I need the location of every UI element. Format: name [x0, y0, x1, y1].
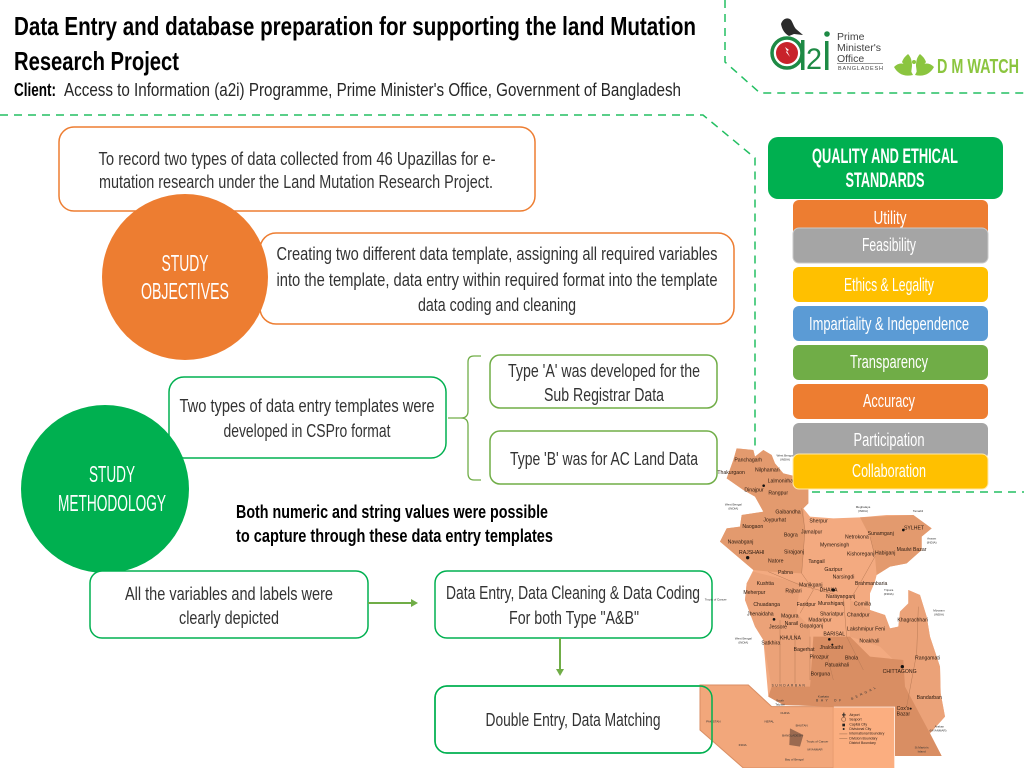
brace connector: [448, 356, 481, 480]
panel: objective statement: [59, 127, 535, 211]
map of Bangladesh: RAJSHAHI: [739, 550, 764, 556]
map of Bangladesh: Gaibandha: [775, 509, 801, 515]
map of Bangladesh: (INDIA): [738, 640, 748, 644]
title: Data Entry and database preparation for supporting the land Mutation: [14, 11, 696, 41]
map of Bangladesh: DHAKA: [820, 588, 838, 594]
map of Bangladesh: (INDIA): [927, 540, 937, 544]
map of Bangladesh: Sirajganj: [784, 550, 804, 556]
map of Bangladesh: Tamabil: [913, 509, 923, 513]
map of Bangladesh: Jessore: [769, 624, 787, 630]
map of Bangladesh: (INDIA): [858, 509, 868, 513]
map of Bangladesh: Faridpur: [797, 602, 816, 608]
map of Bangladesh: KHULNA: [780, 636, 801, 642]
map of Bangladesh: INDIA: [739, 743, 747, 747]
map of Bangladesh: Assam: [927, 536, 937, 540]
map of Bangladesh: Bhola: [845, 656, 858, 662]
standards heading: STANDARDS: [846, 169, 924, 192]
bold note: [236, 502, 553, 546]
map of Bangladesh: Noakhali: [859, 638, 879, 644]
client line: Access to Information (a2i) Programme, Prime Minister's Office, Government of Bangladesh: [64, 80, 681, 100]
standard: ethics and legality: Ethics & Legality: [844, 275, 934, 295]
map of Bangladesh: Satkhira: [761, 640, 780, 646]
panel: objective activities: Creating two different data template, assigning all required variables: [276, 244, 718, 264]
map of Bangladesh: Netrokona: [845, 534, 869, 540]
panel: type A: Type 'A' was developed for the: [508, 361, 700, 381]
map of Bangladesh: (MYANMAR): [929, 728, 947, 732]
map of Bangladesh: Jamalpur: [801, 529, 822, 535]
map of Bangladesh: (INDIA): [728, 506, 738, 510]
panel: variables and labels: clearly depicted: [179, 608, 279, 628]
map of Bangladesh: Shariatpur: [820, 611, 844, 617]
standards heading: [768, 137, 1003, 199]
map of Bangladesh: Capital City: [849, 722, 867, 726]
title: [14, 11, 696, 76]
map of Bangladesh: Habiganj: [875, 551, 895, 557]
map of Bangladesh: Tropic of Cancer: [705, 598, 727, 602]
map of Bangladesh: Jhalokathi: [820, 645, 843, 651]
panel: data entry and cleaning: Data Entry, Data Cleaning & Data Coding: [446, 583, 700, 603]
panel: double entry: [435, 686, 712, 753]
map of Bangladesh: Brahmanbaria: [855, 581, 888, 587]
map of Bangladesh: Divisional City: [849, 727, 871, 731]
standard: feasibility: Feasibility: [862, 235, 916, 255]
panel: objective activities: data coding and cleaning: [418, 295, 576, 315]
map of Bangladesh: Seaport: [849, 718, 862, 722]
map of Bangladesh: Manikganj: [799, 582, 823, 588]
map of Bangladesh: (INDIA): [780, 458, 790, 462]
map of Bangladesh: Patuakhali: [825, 663, 849, 669]
map of Bangladesh: Gopalganj: [800, 623, 823, 629]
map of Bangladesh: Madaripur: [808, 618, 832, 624]
map of Bangladesh: Joypurhat: [763, 517, 787, 523]
panel: variables and labels: All the variables and labels were: [125, 584, 333, 604]
map of Bangladesh: Panchagarh: [734, 458, 762, 464]
map of Bangladesh: Narsingdi: [833, 574, 854, 580]
map of Bangladesh: CHINA: [780, 711, 790, 715]
map of Bangladesh: Rangamati: [915, 655, 940, 661]
map of Bangladesh: Kishoreganj: [847, 552, 874, 558]
map of Bangladesh: Borguna: [811, 671, 830, 677]
map of Bangladesh: International Boundary: [849, 732, 885, 736]
map of Bangladesh: Dinajpur: [744, 488, 764, 494]
map of Bangladesh: Thakurgaon: [717, 470, 745, 476]
map of Bangladesh: Tangail: [808, 559, 825, 565]
panel: objective activities: [260, 233, 734, 324]
logo: D M Watch: [894, 54, 1019, 78]
map of Bangladesh: Division Boundary: [849, 736, 878, 740]
logo: a2i Prime Minister's Office: 2: [806, 43, 822, 76]
arrow: variables to data entry: [368, 599, 418, 607]
map of Bangladesh: Talpatti: [775, 702, 785, 706]
bold note: to capture through these data entry templates: [236, 526, 553, 546]
map of Bangladesh: CHITTAGONG: [883, 669, 917, 675]
map of Bangladesh: Tropic of Cancer: [806, 739, 828, 743]
logo: a2i Prime Minister's Office: Office: [837, 53, 864, 65]
panel: templates: [169, 377, 446, 458]
standard: feasibility: [793, 228, 988, 263]
map of Bangladesh: West Bengal: [777, 454, 794, 458]
map of Bangladesh: Bay of Bengal: [785, 758, 804, 762]
map of Bangladesh: Cox's: [897, 706, 910, 712]
map of Bangladesh: Mymensingh: [820, 542, 849, 548]
map of Bangladesh: Kushtia: [757, 581, 774, 587]
map of Bangladesh: SYLHET: [904, 525, 925, 531]
map of Bangladesh: Munshiganj: [818, 601, 844, 607]
map of Bangladesh: Rangpur: [768, 491, 788, 497]
map of Bangladesh: [700, 448, 947, 768]
map of Bangladesh: Meherpur: [743, 590, 766, 596]
map of Bangladesh: PAKISTAN: [706, 720, 720, 724]
arrow: data entry to double entry: [556, 638, 564, 676]
bold note: Both numeric and string values were possible: [236, 502, 548, 522]
map of Bangladesh: Bandarban: [917, 695, 942, 701]
map of Bangladesh: Chuadanga: [753, 602, 780, 608]
map of Bangladesh: MYANMAR: [807, 748, 823, 752]
panel: type A: Sub Registrar Data: [544, 385, 665, 405]
study methodology circle: [21, 405, 189, 573]
panel: quality and ethical standards: [768, 137, 1003, 489]
study methodology circle: STUDY: [89, 461, 135, 487]
panel: templates: Two types of data entry templates were: [180, 396, 434, 416]
map of Bangladesh: Island: [918, 749, 926, 753]
map of Bangladesh: BARISAL: [823, 632, 845, 638]
study objectives circle: [102, 194, 268, 360]
map of Bangladesh: Jhenaidaha: [747, 611, 774, 617]
map of Bangladesh: Natore: [768, 559, 784, 565]
map of Bangladesh: Narayanganj: [826, 594, 855, 600]
map of Bangladesh: Meghalaya: [856, 505, 871, 509]
logo: a2i Prime Minister's Office: BANGLADESH: [838, 66, 883, 72]
panel: variables and labels: [90, 571, 368, 638]
standard: transparency: [793, 345, 988, 380]
standard: participation: [793, 423, 988, 459]
map of Bangladesh: District Boundary: [849, 741, 876, 745]
map of Bangladesh: Naogaon: [742, 524, 763, 530]
map of Bangladesh: Tripura: [884, 588, 894, 592]
study objectives circle: OBJECTIVES: [141, 278, 229, 304]
map of Bangladesh: NEPAL: [765, 720, 774, 724]
map of Bangladesh: South: [776, 699, 784, 703]
map of Bangladesh: West Bengal: [735, 636, 752, 640]
standard: ethics and legality: [793, 267, 988, 302]
standard: transparency: Transparency: [850, 352, 928, 372]
map of Bangladesh: Bazar: [897, 712, 910, 718]
standard: participation: Participation: [854, 430, 924, 450]
panel: templates: developed in CSPro format: [224, 421, 390, 441]
map of Bangladesh: Airport: [849, 713, 860, 717]
map of Bangladesh: Narail: [785, 621, 798, 627]
logo: a2i Prime Minister's Office: [772, 18, 883, 76]
standard: collaboration: [793, 454, 988, 489]
map of Bangladesh: Khagrachhari: [897, 617, 928, 623]
study methodology circle: METHODOLOGY: [58, 490, 166, 516]
map of Bangladesh: Gazipur: [824, 567, 843, 573]
map of Bangladesh: BAY OF: [816, 699, 844, 703]
map of Bangladesh: Nawabganj: [728, 540, 753, 546]
logo: a2i Prime Minister's Office: Prime: [837, 31, 865, 43]
panel: objective statement: To record two types of data collected from 46 Upazillas for e-: [98, 149, 496, 169]
standard: utility: [793, 200, 988, 236]
map of Bangladesh: BANGLADESH: [782, 734, 803, 738]
study objectives circle: STUDY: [162, 250, 208, 276]
panel: data entry and cleaning: [435, 571, 712, 638]
standard: utility: Utility: [874, 208, 906, 228]
standard: collaboration: Collaboration: [852, 461, 926, 481]
map of Bangladesh: BHUTAN: [796, 723, 808, 727]
panel: objective activities: into the template, data entry within required format into the template: [276, 270, 718, 290]
map of Bangladesh: St Martin's: [915, 745, 929, 749]
map of Bangladesh: Rajbari: [785, 589, 802, 595]
panel: type B: [490, 431, 717, 484]
map of Bangladesh: Lakshmipur Feni: [847, 627, 885, 633]
map of Bangladesh: SUNDARBAN: [772, 683, 806, 687]
panel: double entry: Double Entry, Data Matching: [486, 710, 660, 730]
standard: accuracy: [793, 384, 988, 419]
map of Bangladesh: Comilla: [854, 601, 871, 607]
map of Bangladesh: Bogra: [784, 532, 798, 538]
standard: impartiality: [793, 306, 988, 341]
map of Bangladesh: BENGAL: [850, 685, 879, 701]
map of Bangladesh: (INDIA): [934, 612, 944, 616]
map of Bangladesh: Nilphamari: [755, 468, 780, 474]
standard: accuracy: Accuracy: [863, 391, 915, 411]
map of Bangladesh: Magura: [781, 613, 799, 619]
map of Bangladesh: Arakan: [935, 724, 944, 728]
map of Bangladesh: West Bengal: [725, 502, 742, 506]
map of Bangladesh: (INDIA): [884, 592, 894, 596]
map of Bangladesh: Pirozpur: [810, 654, 829, 660]
map of Bangladesh: Mizoram: [933, 608, 945, 612]
panel: data entry and cleaning: For both Type "A&B": [509, 608, 639, 628]
panel: type B: Type 'B' was for AC Land Data: [510, 449, 699, 469]
map of Bangladesh: Pabna: [778, 570, 793, 576]
logo: a2i Prime Minister's Office: Minister's: [837, 42, 881, 54]
panel: type A: [490, 355, 717, 408]
map of Bangladesh: Bagerhat: [794, 647, 815, 653]
map of Bangladesh: Kuakata: [818, 694, 829, 698]
client line: Client:: [14, 80, 56, 100]
title: Research Project: [14, 46, 179, 76]
map of Bangladesh: Sherpur: [809, 518, 828, 524]
map of Bangladesh: Chandpur: [847, 612, 870, 618]
map of Bangladesh: Lalmonirhat: [768, 479, 795, 485]
panel: objective statement: mutation research under the Land Mutation Research Project.: [99, 172, 493, 192]
map of Bangladesh: Maulvi Bazar: [897, 547, 927, 553]
map of Bangladesh: Sunamganj: [868, 531, 894, 537]
